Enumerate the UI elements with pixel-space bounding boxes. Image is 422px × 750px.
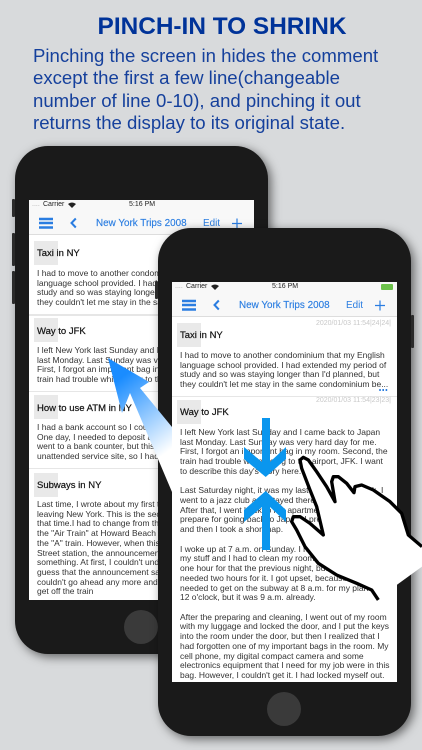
note text 2: I woke up at 7 a.m. on Sunday. I had to finish packing — [180, 544, 380, 554]
note text 4: leaving New York. This is the second story from — [37, 509, 215, 519]
note text 2 — [180, 427, 390, 680]
note text 1: language school provided. I had extended my period of — [180, 360, 386, 370]
note text 2: prepare for going back to Japan. I prepared my things — [180, 514, 382, 524]
side button: mute — [12, 199, 15, 217]
note text 4: the "A" train. However, when this train reached — [37, 538, 212, 548]
note text 1 — [180, 350, 388, 389]
note text 1: language school provided. I had extended my period of — [37, 278, 243, 288]
home button — [267, 692, 301, 726]
status time: 5:16 PM — [129, 201, 155, 208]
status dots: .... — [175, 283, 183, 290]
nav title: New York Trips 2008 — [239, 300, 330, 311]
icon: plus — [375, 300, 385, 310]
note text 2: I left New York last Sunday and I came back to Japan — [37, 345, 237, 355]
screen: note list — [29, 200, 254, 600]
icon: wifi — [211, 284, 219, 290]
status carrier: Carrier — [186, 283, 207, 290]
edit button: Edit — [203, 218, 220, 229]
note text 2: First, I forgot an important bag in my room. Second, the — [37, 364, 245, 374]
side button: left — [155, 281, 158, 299]
note text 1: I had to move to another condominium that my English — [37, 268, 242, 278]
side button: volume down — [12, 271, 15, 304]
screen: note detail — [172, 282, 397, 682]
note square 2 — [34, 318, 58, 342]
note text 2: After that, I went back to my apartment and started to — [180, 505, 380, 515]
note text 2: last Monday. Last Sunday was very hard day for me. — [180, 437, 377, 447]
nav bar — [29, 200, 254, 235]
phone: front — [158, 228, 411, 736]
note text 4 — [37, 499, 215, 596]
icon: back chevron — [70, 218, 76, 228]
note title 4: Subways in NY — [37, 480, 101, 491]
note text 2: my stuff and I had to clean my room. I had done it for — [180, 553, 378, 563]
nav bar — [172, 282, 397, 317]
note text 4: that time.I had to change from the subway to — [37, 518, 204, 528]
description text: except the first a few line(changeable — [33, 67, 340, 88]
note text 2: and then I took a short nap. — [180, 524, 283, 534]
note text 2: into the room under the door, but then I realized that I — [180, 631, 380, 641]
note text 4: Last time, I wrote about my first trip after — [37, 499, 188, 509]
note square 2 — [177, 400, 201, 424]
note text 2: one hour for that the previous night, but I thought I — [180, 563, 368, 573]
note text 2: Last Saturday night, it was my last night in New York. I — [180, 485, 383, 495]
note text 4: couldn't go ahead any more and I had to — [37, 577, 188, 587]
status time: 5:16 PM — [272, 283, 298, 290]
note title 2: Way to JFK — [180, 407, 229, 418]
nav title: New York Trips 2008 — [96, 218, 187, 229]
note title 3: How to use ATM in NY — [37, 403, 132, 414]
note text 3: unattended service site, so I had to use the machine. — [37, 451, 235, 461]
side button: power — [411, 315, 414, 348]
timestamp 2: 2020/01/03 11:54|23|23| — [316, 397, 391, 404]
note square 4 — [34, 473, 58, 497]
note text 3 — [37, 422, 235, 461]
note text 2: train had trouble while going to the airport, JFK. I want — [180, 456, 383, 466]
timestamp 1: 2020/01/03 11:54|24|24| — [316, 320, 391, 327]
note text 4: Street station, the announcement said — [37, 548, 180, 558]
side button: volume up — [12, 233, 15, 266]
note text 2 — [37, 345, 245, 384]
note text 2: After the preparing and cleaning, I went out of my room — [180, 612, 387, 622]
note text 2: needed two hours for it. I got upset, because I — [180, 573, 352, 583]
note text 1 — [37, 268, 245, 307]
note text 4: guess that the announcement said the train — [37, 567, 199, 577]
home button — [124, 610, 158, 644]
note text 2: with my luggage and locked the door, and I put the keys — [180, 621, 389, 631]
note text 3: One day, I needed to deposit a check, so I — [37, 432, 195, 442]
note text 2: needed to get on the subway at 8 a.m. for my plan — [180, 582, 368, 592]
note text 1: study and so was staying longer than I'd planned, but — [180, 369, 379, 379]
heading: PINCH-IN TO SHRINK — [98, 13, 346, 40]
note text 3: I had a bank account so I could use an ATM in NY. — [37, 422, 225, 432]
description text — [33, 45, 378, 133]
phone: back — [15, 146, 268, 654]
icon: hamburger menu — [182, 300, 196, 311]
note square 1 — [34, 241, 58, 265]
note text 2: train had trouble while going to the airport, JFK. I want — [37, 374, 240, 384]
note title 2: Way to JFK — [37, 326, 86, 337]
description text: number of line 0-10), and pinching it out — [33, 90, 361, 111]
note text 1: I had to move to another condominium that my English — [180, 350, 385, 360]
note title 1: Taxi in NY — [180, 330, 223, 341]
status dots: .... — [32, 201, 40, 208]
description text: returns the display to its original state. — [33, 112, 345, 133]
note text 2: last Monday. Last Sunday was very hard day for me. — [37, 355, 234, 365]
note text 2: went to a jazz club and stayed there until midnight. — [180, 495, 370, 505]
note text 2: electronics equipment that I need for my job were in this — [180, 660, 389, 670]
note text 2: 12 o'clock, but it was 9 a.m. already. — [180, 592, 316, 602]
note text 4: the "Air Train" at Howard Beach station, and — [37, 528, 202, 538]
note text 2: bag. However, I couldn't get it. I had locked myself out. — [180, 670, 385, 680]
note text 4: get off the train — [37, 586, 93, 596]
icon: wifi — [68, 202, 76, 208]
description text: Pinching the screen in hides the comment — [33, 45, 378, 66]
note text 4: something. At first, I couldn't understand but — [37, 557, 202, 567]
icon: hamburger menu — [39, 218, 53, 229]
note text 2: cell phone, my digital compact camera and some — [180, 651, 364, 661]
edit button: Edit — [346, 300, 363, 311]
icon: back chevron — [213, 300, 220, 310]
note text 1: they couldn't let me stay in the same condominium be... — [180, 379, 388, 389]
note square 1 — [177, 323, 201, 347]
note text 2: I left New York last Sunday and I came back to Japan — [180, 427, 380, 437]
note text 1: study and so was staying longer than I'd planned, but — [37, 287, 236, 297]
note text 2: to describe this day's story here. — [180, 466, 301, 476]
icon: plus — [232, 218, 242, 228]
note text 3: went to a bank counter, but this bank was an — [37, 441, 204, 451]
status carrier: Carrier — [43, 201, 64, 208]
note square 3 — [34, 395, 58, 419]
note text 1: they couldn't let me stay in the same condominium be... — [37, 297, 245, 307]
note text 2: had forgotten one of my important bags in the room. My — [180, 641, 389, 651]
more indicator — [379, 389, 388, 391]
note title 1: Taxi in NY — [37, 248, 80, 259]
icon: battery — [381, 284, 393, 290]
note text 2: First, I forgot an important bag in my room. Second, the — [180, 446, 388, 456]
